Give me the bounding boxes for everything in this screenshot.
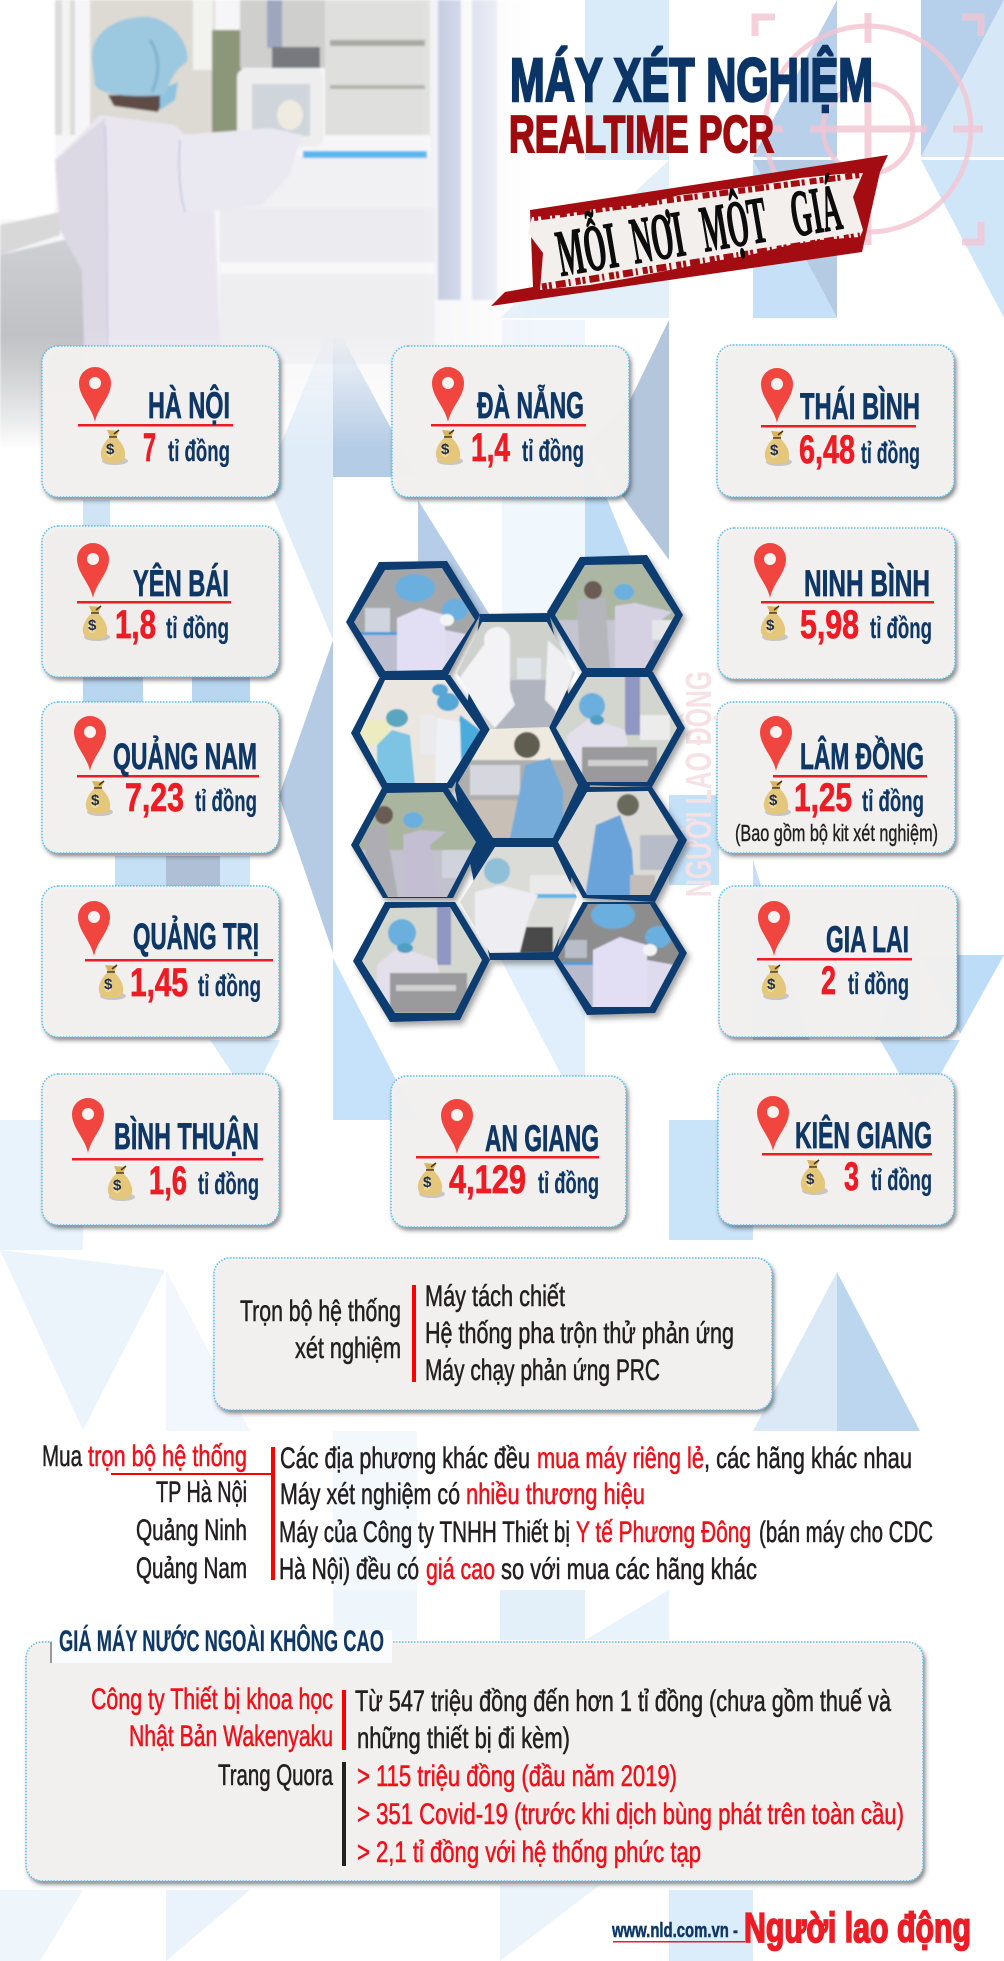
left labels: Quảng Nam	[136, 1552, 247, 1585]
row: Wakenyaku: những thiết bị đi kèm)	[357, 1722, 570, 1755]
title	[509, 13, 983, 245]
price: 1,8	[115, 603, 156, 647]
icon: money bag	[801, 1160, 828, 1195]
panel: foreign machine prices	[26, 1624, 923, 1881]
photo: technician at screen from behind	[460, 847, 577, 953]
price	[799, 428, 920, 472]
icon: money bag	[86, 781, 113, 816]
photo: technician bent over analyser	[556, 677, 677, 782]
icon: pin	[72, 1098, 104, 1153]
price	[130, 961, 261, 1005]
icon: money bag: $	[106, 441, 115, 458]
row: Wakenyaku	[91, 1683, 891, 1755]
card: Thái Bình	[717, 345, 954, 497]
icon: money bag	[101, 430, 128, 465]
icon: money bag: $	[113, 1177, 122, 1194]
right notes: Các địa phương khác đều	[280, 1442, 530, 1475]
banner words	[551, 169, 847, 291]
price	[449, 1158, 599, 1202]
city name: QUẢNG TRỊ	[133, 916, 259, 957]
banner words: MỘT	[695, 183, 773, 266]
left labels: TP Hà Nội	[156, 1476, 247, 1509]
photo: technician in blue gown and face shield	[458, 727, 578, 838]
price	[800, 603, 932, 647]
price: 3	[844, 1155, 859, 1199]
price	[821, 959, 909, 1003]
photo: group in blue gowns	[360, 680, 480, 783]
icon: money bag: $	[806, 1171, 815, 1188]
footer: source and logo	[611, 1904, 971, 1951]
card: Lâm Đồng	[717, 702, 955, 853]
icon: money bag	[436, 430, 463, 465]
icon: money bag	[765, 431, 792, 466]
city name: YÊN BÁI	[133, 562, 229, 604]
icon: pin	[77, 543, 109, 598]
photo: technician loading analyser	[362, 907, 482, 1013]
icon: pin	[757, 1096, 789, 1151]
label: Trọn bộ hệ thống	[240, 1295, 401, 1328]
icon: pin	[79, 367, 111, 422]
icon: money bag: $	[91, 792, 100, 809]
icon: pin	[74, 716, 106, 771]
price: tỉ đồng	[848, 968, 909, 1001]
icon: money bag	[764, 781, 791, 816]
row: Quora: > 115 triệu đồng (đầu năm 2019)	[357, 1760, 677, 1793]
photo: two technicians at screen	[354, 568, 475, 671]
card: Kiên Giang	[718, 1074, 954, 1225]
target reticle	[755, 13, 983, 245]
icon: money bag	[761, 606, 788, 641]
price: 1,25	[794, 776, 852, 820]
price: tỉ đồng	[871, 1164, 932, 1197]
icon: money bag: $	[104, 976, 113, 993]
price: tỉ đồng	[861, 437, 920, 470]
row: Quora: Trang Quora	[218, 1759, 333, 1792]
icon: money bag: $	[769, 792, 778, 809]
city name: AN GIANG	[485, 1118, 599, 1159]
system components: Máy chạy phản ứng PRC	[425, 1354, 660, 1387]
price: tỉ đồng	[198, 1168, 259, 1201]
right notes: Hà Nội) đều có	[279, 1553, 419, 1586]
price	[149, 1159, 259, 1203]
right notes: Y tế Phương Đông	[576, 1516, 751, 1549]
right notes: nhiều thương hiệu	[466, 1478, 645, 1511]
photo: technician in white protective suit	[457, 622, 575, 730]
system components: Máy tách chiết	[425, 1280, 565, 1313]
label	[240, 1295, 401, 1365]
icon: pin	[761, 368, 793, 423]
left labels	[42, 1440, 247, 1585]
price: tỉ đồng	[195, 785, 257, 818]
card: Ninh Bình	[718, 528, 955, 679]
label: xét nghiệm	[295, 1332, 401, 1365]
price: tỉ đồng	[870, 612, 932, 645]
price	[125, 776, 257, 820]
price: 4,129	[449, 1158, 526, 1202]
row: Quora: > 2,1 tỉ đồng với hệ thống phức tạp	[357, 1836, 701, 1869]
row: Quora	[218, 1759, 904, 1869]
city name: NINH BÌNH	[804, 563, 930, 604]
left labels: trọn bộ hệ thống	[88, 1440, 247, 1473]
city name: ĐÀ NẴNG	[477, 385, 584, 426]
price	[115, 603, 229, 647]
right notes	[279, 1442, 933, 1586]
icon: money bag	[99, 965, 126, 1000]
photo: man and woman by window	[555, 564, 675, 668]
banner: mỗi nơi một giá: GIÁ	[785, 171, 847, 251]
price: 5,98	[800, 603, 859, 647]
icon: pin	[758, 901, 790, 956]
city name: GIA LAI	[826, 919, 909, 960]
right notes: mua máy riêng lẻ	[537, 1442, 704, 1475]
price	[844, 1155, 932, 1199]
photo: gowned technician at bench	[558, 791, 678, 895]
city name: QUẢNG NAM	[113, 736, 257, 777]
price: tỉ đồng	[862, 785, 924, 818]
header photo: technician at the PCR machine	[0, 0, 498, 438]
icon: pin	[441, 1099, 473, 1154]
price: 6,48	[799, 428, 855, 472]
right notes: giá cao	[426, 1553, 495, 1586]
price: 1,6	[149, 1159, 187, 1203]
price: 7,23	[125, 776, 184, 820]
card: Hà Nội	[42, 346, 279, 497]
banner: mỗi nơi một giá	[491, 155, 888, 306]
card: Bình Thuận	[42, 1074, 279, 1225]
price: 7	[143, 426, 156, 470]
system components	[425, 1280, 734, 1387]
icon: money bag	[762, 965, 789, 1000]
price: tỉ đồng	[166, 612, 229, 645]
price	[471, 426, 584, 470]
price: 1,4	[471, 426, 511, 470]
icon: money bag	[108, 1166, 135, 1201]
right notes: Máy của Công ty TNHH Thiết bị	[279, 1516, 570, 1549]
icon: money bag	[83, 606, 110, 641]
panel heading: GIÁ MÁY NƯỚC NGOÀI KHÔNG CAO	[59, 1624, 384, 1658]
price: 1,45	[130, 961, 188, 1005]
city name: BÌNH THUẬN	[114, 1115, 259, 1157]
photo: man and woman at machine	[359, 792, 476, 897]
price: tỉ đồng	[168, 435, 230, 468]
price	[143, 426, 230, 470]
website: www.nld.com.vn -	[611, 1920, 738, 1942]
card: Gia Lai	[719, 886, 957, 1037]
navy hex frames	[346, 555, 687, 1022]
icon: pin	[760, 716, 792, 771]
comparison: buying full system vs separate machines	[42, 1440, 933, 1586]
right notes: , các hãng khác nhau	[704, 1442, 912, 1475]
card: An Giang	[391, 1076, 626, 1227]
city name: HÀ NỘI	[148, 384, 230, 426]
price: tỉ đồng	[538, 1167, 599, 1200]
row: Wakenyaku: Công ty Thiết bị khoa học	[91, 1683, 333, 1716]
price: 2	[821, 959, 836, 1003]
icon: money bag	[418, 1163, 445, 1198]
icon: pin	[432, 367, 464, 422]
system components: Hệ thống pha trộn thử phản ứng	[425, 1317, 734, 1350]
price: tỉ đồng	[522, 435, 584, 468]
hexagon photo collage	[345, 555, 687, 1022]
icon: money bag: $	[770, 442, 779, 459]
watermark: newspaper name: NGƯỜI LAO ĐỘNG	[677, 671, 719, 897]
icon: money bag: $	[423, 1174, 432, 1191]
card: Quảng Trị	[42, 886, 279, 1037]
row: Wakenyaku: Nhật Bản Wakenyaku	[129, 1720, 333, 1753]
photo: two technicians close up	[558, 904, 679, 1007]
right notes: Máy xét nghiệm có	[280, 1478, 460, 1511]
icon: pin	[754, 543, 786, 598]
price: tỉ đồng	[198, 970, 261, 1003]
icon: money bag: $	[441, 441, 450, 458]
icon: money bag: $	[88, 617, 97, 634]
card: Yên Bái	[42, 526, 279, 677]
banner words: NƠI	[625, 197, 690, 278]
icon: money bag: $	[766, 617, 775, 634]
panel: full testing system	[214, 1258, 772, 1410]
card: Quảng Nam	[42, 702, 279, 853]
left labels: Quảng Ninh	[136, 1514, 247, 1547]
banner words: MỖI	[551, 207, 623, 291]
price	[794, 776, 924, 820]
icon: money bag: $	[767, 976, 776, 993]
city name: LÂM ĐỒNG	[800, 735, 924, 777]
icon: pin	[78, 901, 110, 956]
city name: THÁI BÌNH	[800, 386, 920, 427]
left labels: Mua	[42, 1440, 82, 1473]
right notes: so với mua các hãng khác	[501, 1553, 757, 1586]
subtitle line: REALTIME PCR	[509, 106, 774, 164]
card: Đà Nẵng	[392, 346, 629, 497]
